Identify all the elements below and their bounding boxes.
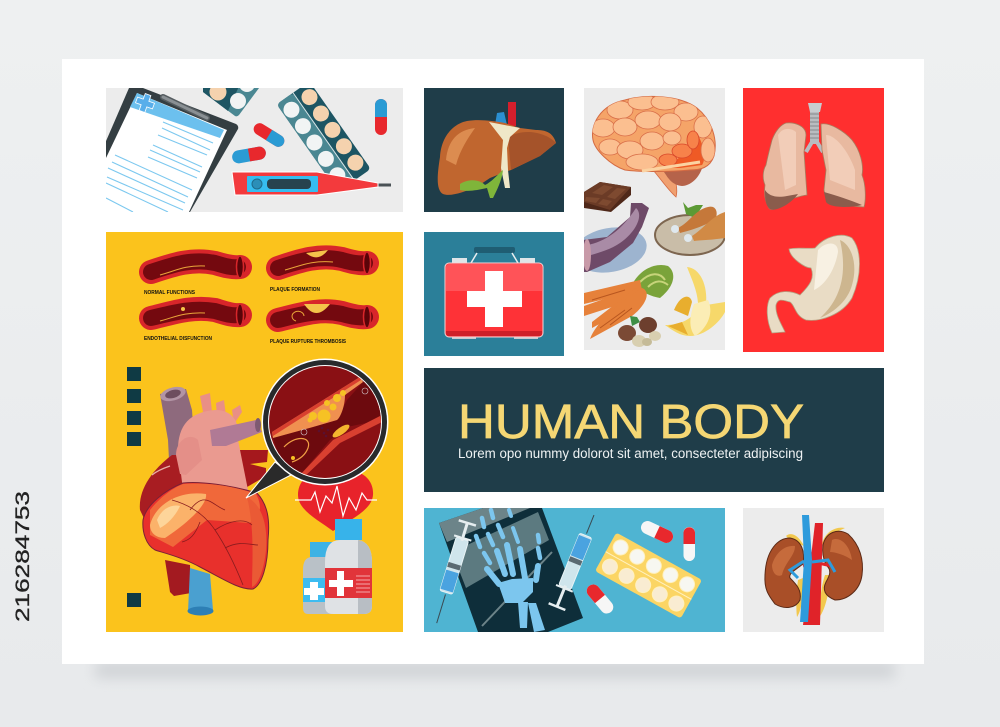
icon: lungs (763, 103, 865, 210)
icon: blister pack (278, 88, 370, 179)
sheet shadow (95, 662, 895, 678)
vessel: plaque formation (278, 250, 370, 274)
legend squares (127, 367, 141, 607)
icon: anatomical heart (140, 384, 269, 616)
icon: fish on plate (584, 203, 649, 273)
vessel labels: ENDOTHELIAL DISFUNCTION (144, 336, 212, 342)
vessel: endothelial disfunction (151, 304, 244, 326)
vessel labels (144, 287, 346, 345)
icon: capsule bottom (586, 584, 614, 614)
icon: large bottle (325, 519, 372, 614)
icon: brain (591, 94, 715, 197)
panel: title banner (424, 368, 884, 492)
vessel: normal functions (151, 256, 244, 278)
icon: capsule top (640, 521, 674, 543)
subtitle: Lorem opo nummy dolorot sit amet, consecteter adipiscing (458, 446, 803, 461)
panel: x-ray and syringes (424, 508, 725, 632)
icon: liver (438, 102, 556, 198)
icon: blister pack top (203, 88, 259, 116)
panel: liver (424, 88, 564, 212)
icon: syringe left (436, 519, 476, 624)
icon: small bottle (303, 542, 332, 614)
icon: chocolate (584, 182, 631, 212)
icon: yellow blister pack (595, 533, 702, 618)
icon: first aid kit (445, 247, 543, 339)
icon: banana (665, 267, 725, 336)
panel: brain and food (570, 88, 725, 350)
icon: thermometer (232, 172, 391, 195)
icon: carrots (584, 265, 673, 339)
icon: hand bones (476, 510, 545, 632)
icon: small heart with pulse (295, 470, 377, 531)
stock id number: 216284753 (13, 491, 34, 622)
icon: capsule vertical (684, 527, 695, 561)
vessel: plaque rupture thrombosis (278, 304, 370, 328)
icon: nuts (618, 316, 661, 347)
icon: chicken on plate (655, 202, 725, 255)
panel: clipboard, pills and thermometer (106, 88, 403, 212)
panel: kidneys (743, 508, 884, 632)
icon: vertical capsule (375, 99, 387, 135)
icon: capsule red blue (254, 123, 284, 147)
vessel labels: PLAQUE RUPTURE THROMBOSIS (270, 339, 346, 345)
callout: magnifier with plaque (246, 358, 390, 498)
panel: lungs and stomach (743, 88, 884, 352)
panel: yellow cardiovascular (106, 232, 403, 632)
icon: capsule blue red (232, 146, 266, 164)
panel: first aid kit (424, 232, 564, 356)
icon: clipboard (100, 88, 238, 212)
icon: kidneys (765, 515, 862, 625)
title: HUMAN BODY (458, 396, 804, 449)
icon: syringe right (548, 514, 594, 612)
vessel labels: PLAQUE FORMATION (270, 287, 320, 293)
vessel labels: NORMAL FUNCTIONS (144, 290, 195, 296)
white sheet (62, 59, 924, 664)
icon: stomach (767, 235, 860, 333)
icon: x-ray film (439, 508, 583, 632)
